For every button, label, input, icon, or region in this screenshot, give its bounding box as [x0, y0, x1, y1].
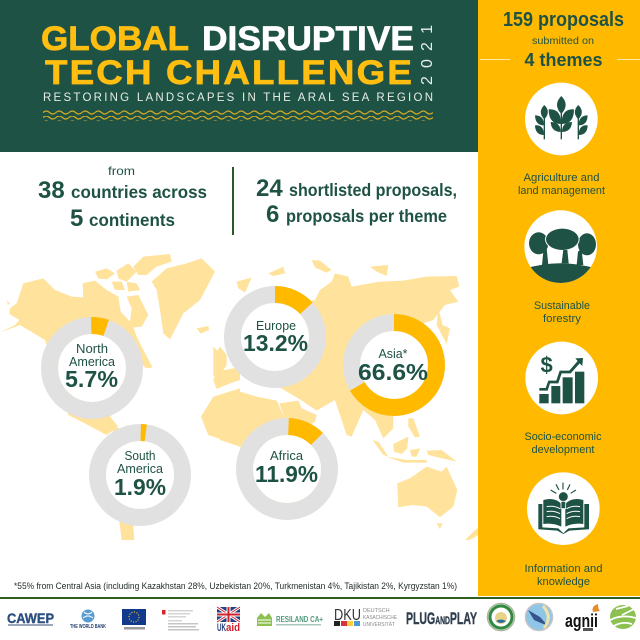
year 2021: 2021: [419, 25, 436, 85]
icon: socio-economic growth: $: [541, 353, 553, 378]
stat: 24: 24: [256, 175, 283, 202]
donut: Africa: 11.9%: [255, 461, 318, 487]
logo: DKU: DEUTSCH: [363, 608, 390, 614]
header panel: [0, 0, 478, 152]
logo: UK aid: UK: [217, 622, 226, 634]
donut: North America: 5.7%: [65, 366, 118, 392]
logo: DKU: DKU: [334, 607, 361, 624]
label: forestry: Sustainable: [534, 300, 590, 312]
text: submitted on: submitted on: [532, 35, 594, 47]
label: agriculture: land management: [518, 185, 605, 197]
logo: round emblem green: [488, 604, 514, 630]
logo: The World Bank: [70, 610, 106, 630]
label: information: Information and: [524, 563, 602, 575]
donut: Europe: Europe: [256, 319, 296, 333]
icon: information book: [527, 472, 600, 545]
label: agriculture: Agriculture and: [524, 172, 600, 184]
label: information: [524, 563, 602, 588]
label: socio-economic: Socio-economic: [524, 431, 602, 443]
stat label: continents: continents: [89, 210, 175, 230]
donut: Africa: [243, 425, 331, 513]
logo: Plug and Play: PLUGANDPLAY: [406, 609, 477, 628]
icon: socio-economic growth: [525, 342, 598, 414]
map: Americas and western Europe: [0, 254, 240, 540]
decorative waves: [43, 110, 433, 115]
stat: 6: 6: [266, 201, 279, 228]
donut: Asia: Asia*: [378, 347, 408, 361]
donut: Europe: [232, 294, 318, 380]
donut: Asia: 66.6%: [358, 359, 428, 385]
donut: Europe: 13.2%: [243, 330, 308, 356]
panel: themes sidebar: [478, 0, 640, 596]
subtitle: RESTORING LANDSCAPES IN THE ARAL SEA REGION: [43, 92, 433, 104]
donut: South America: [98, 424, 182, 518]
logo: UK aid: aid: [226, 622, 240, 634]
stat: 5: 5: [70, 205, 83, 232]
logo: DKU: KASACHISCHE: [363, 615, 397, 621]
map: Eurasia, Africa and Oceania: [213, 260, 479, 540]
stats: countries: [38, 164, 207, 232]
icon: agriculture: [525, 83, 598, 155]
donut: South America: South: [124, 449, 156, 463]
label: forestry: [534, 300, 590, 325]
logo: round emblem blue: [526, 604, 552, 630]
title: Tech Challenge: TECH CHALLENGE: [45, 54, 414, 92]
logo: agnii: [565, 604, 600, 631]
footnote: *55% from Central Asia (including Kazakhstan 28%, Uzbekistan 20%, Turkmenistan 4%, Tajikistan 2%, Kyrgyzstan 1%): [14, 581, 457, 591]
label: information: knowledge: [537, 576, 590, 588]
donut: South America: 1.9%: [114, 474, 166, 500]
title: Global: GLOBAL: [41, 20, 189, 58]
heading: 4 themes: 4 themes: [524, 49, 602, 70]
sidebar heading: [503, 9, 624, 70]
logo: CAWEP: CAWEP: [7, 610, 54, 626]
sidebar rule right: [617, 59, 640, 60]
donut: North America: America: [69, 355, 115, 369]
title: Disruptive: DISRUPTIVE: [202, 20, 414, 58]
logo: DKU: UNIVERSITÄT: [363, 621, 396, 628]
stat label: countries across: countries across: [71, 182, 207, 202]
donut: Africa: Africa: [270, 449, 303, 463]
icon: forestry: [523, 210, 598, 287]
title block: [41, 20, 414, 92]
stat label: shortlisted proposals: shortlisted proposals,: [289, 180, 457, 200]
logo: Swiss confederation: [162, 610, 199, 630]
donut: South America: America: [117, 462, 163, 476]
label: socio-economic: [524, 431, 602, 456]
label: agriculture: [518, 172, 605, 197]
logo: DKU: [334, 607, 397, 628]
logo: Resiland CA+: RESILAND CA+: [276, 615, 323, 624]
donut: Asia: [352, 322, 436, 408]
logo: green leaf: [610, 605, 636, 629]
donut: North America: North: [76, 342, 108, 356]
sidebar rule left: [480, 59, 510, 60]
donut: North America: [49, 325, 135, 411]
world map background: [0, 254, 479, 540]
text: from: from: [108, 164, 135, 178]
logo: UK aid: [217, 607, 240, 634]
logo: The World Bank: THE WORLD BANK: [70, 624, 106, 630]
logo strip: [7, 604, 636, 634]
logo: agnii: agnii: [565, 611, 598, 631]
label: socio-economic: development: [532, 444, 594, 456]
divider: [232, 167, 234, 235]
heading: 159 proposals: 159 proposals: [503, 9, 624, 31]
stat: 38: 38: [38, 177, 65, 204]
footer rule: [0, 597, 640, 599]
logo: Resiland CA+: [257, 613, 323, 626]
stats: shortlisted: [256, 175, 457, 228]
stat label: proposals per theme: proposals per theme: [286, 206, 447, 226]
label: forestry: forestry: [543, 313, 582, 325]
logo: European Union: [122, 609, 146, 630]
